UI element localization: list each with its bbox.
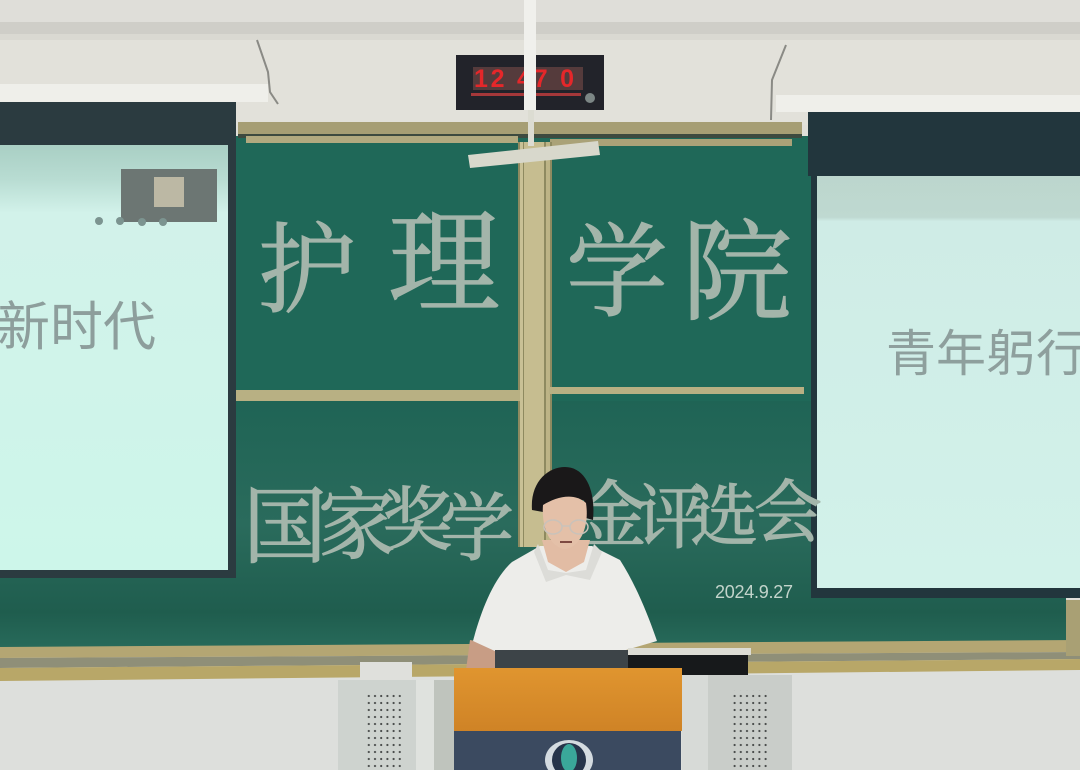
chalk title line two: 金: [575, 476, 647, 556]
chalk title line two: 会: [754, 475, 822, 551]
speaker: [466, 467, 657, 670]
collar: [534, 544, 602, 582]
projector mounts: [0, 40, 1080, 120]
video thumbnail: [121, 169, 217, 222]
left projection screen: [0, 100, 236, 578]
chalk title line one: 院: [682, 213, 792, 335]
chalk title line one: [258, 203, 792, 335]
podium: [338, 668, 792, 770]
podium wood front: [454, 668, 682, 731]
board frame top: [238, 122, 802, 134]
chalk title line one: 学: [566, 218, 668, 331]
horizontal dividers: [234, 390, 520, 401]
hair: [532, 467, 593, 520]
laptop and items: [360, 648, 751, 680]
chalk title line one: 理: [388, 203, 500, 327]
glasses: [544, 520, 588, 534]
face: [543, 497, 587, 549]
mouth: [560, 541, 572, 543]
wall upper: [0, 0, 1080, 125]
vertical divider: [518, 142, 552, 547]
chalk title line two: [243, 475, 822, 575]
neck: [542, 540, 590, 572]
podium logo: [545, 740, 593, 770]
blackboard: [0, 122, 1080, 681]
lower wall: [0, 668, 1080, 770]
chalk title line two: 学: [440, 489, 514, 571]
board lower frame: [0, 640, 1080, 658]
chalk title line two: 家: [318, 482, 396, 569]
chalk title line two: 国: [243, 482, 327, 575]
chalk date: 2024.9.27: [715, 582, 793, 602]
clock: 12 47 0: [474, 65, 574, 93]
slide text left: 新时代: [0, 298, 156, 357]
ceiling pole and light bar: [468, 0, 600, 168]
chalk title line two: 选: [690, 479, 758, 555]
chalk title line two: 奖: [382, 483, 452, 560]
clock: [456, 55, 604, 110]
right projection screen: [808, 112, 1080, 598]
chalk title line one: 护: [258, 218, 356, 326]
arm: [466, 640, 498, 670]
speaker dots right: [732, 690, 769, 770]
chalk title line two: 评: [636, 481, 706, 558]
speaker dots left: [364, 694, 401, 770]
podium dark panel: [454, 731, 681, 770]
shirt: [473, 546, 657, 652]
